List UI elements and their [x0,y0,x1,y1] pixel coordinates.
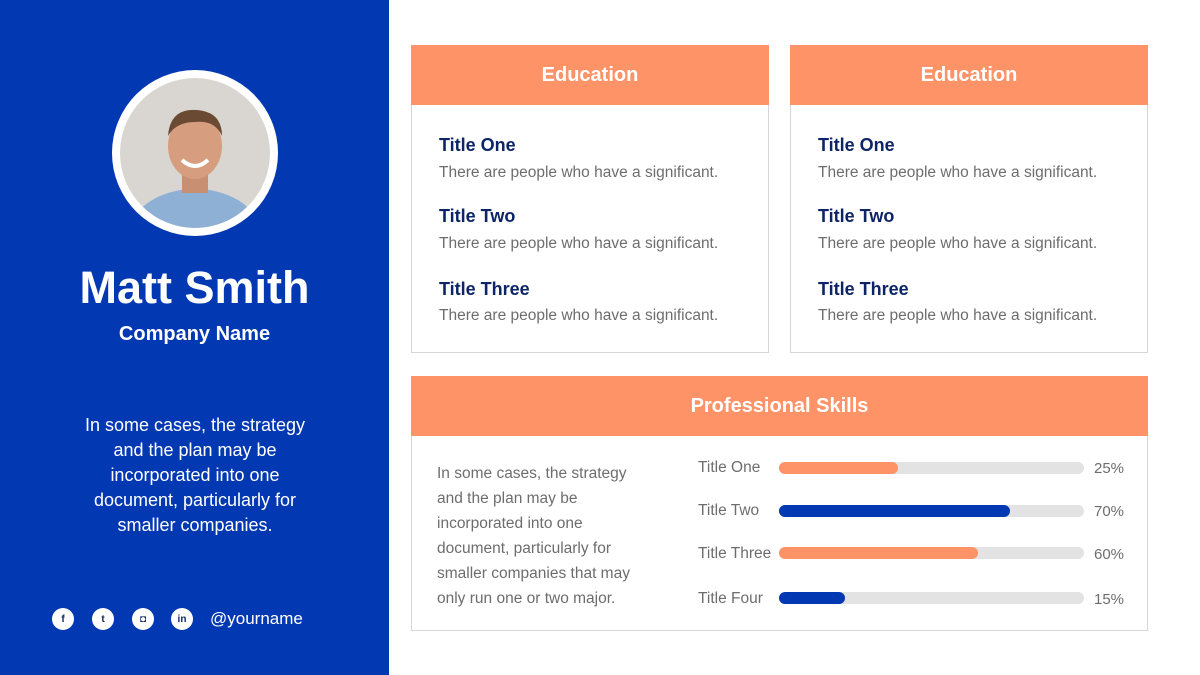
panel: education 2: Title One [818,135,895,155]
social icons: ◘ [140,614,146,624]
header [790,45,1148,105]
bar chart: skills [698,459,1124,608]
social icons [52,608,303,630]
social icons: t [101,614,105,624]
panel: education 2: There are people who have a significant. [818,235,1097,252]
bar chart: skills: Title Three [698,545,771,562]
panel: education 1: Title One [439,135,516,155]
panel: education 1 [411,45,769,353]
panel: education 1: Title Three [439,279,530,299]
social icons: @yourname [210,609,303,628]
bar chart: skills: Title Four [698,590,763,607]
panel: education 1: There are people who have a significant. [439,235,718,252]
panel: education 1: Title Two [439,206,515,226]
text: company name: Company Name [119,323,270,345]
bar chart: skills: 70% [1094,503,1124,520]
panel: professional skills [411,376,1148,631]
header [411,45,769,105]
panel: profile sidebar [0,0,389,675]
bar chart: skills: 25% [1094,460,1124,477]
panel: education 1: There are people who have a significant. [439,307,718,324]
bar chart: skills: 60% [1094,546,1124,563]
header: Professional Skills [691,394,868,416]
icon: profile photo [112,70,278,236]
panel: education 2: There are people who have a significant. [818,307,1097,324]
panel: education 1: There are people who have a significant. [439,164,718,181]
heading: name: Matt Smith [80,262,310,313]
social icons: f [61,614,65,624]
text: skills description: In some cases, the strategy and the plan may be incorporated into one document, particularly for smaller companies that may only run one or two major. [437,465,630,607]
header: Education [921,64,1017,86]
bar chart: skills: Title One [698,459,760,476]
header: Education [542,64,638,86]
bar chart: skills: 15% [1094,591,1124,608]
social icons: in [178,614,186,624]
header [411,376,1148,436]
panel: education 2 [790,45,1148,353]
panel: education 2: There are people who have a significant. [818,164,1097,181]
panel: education 2: Title Three [818,279,909,299]
bar chart: skills: Title Two [698,502,759,519]
text: bio: In some cases, the strategy and the plan may be incorporated into one document, particularly for smaller companies. [85,415,305,535]
panel: education 2: Title Two [818,206,894,226]
